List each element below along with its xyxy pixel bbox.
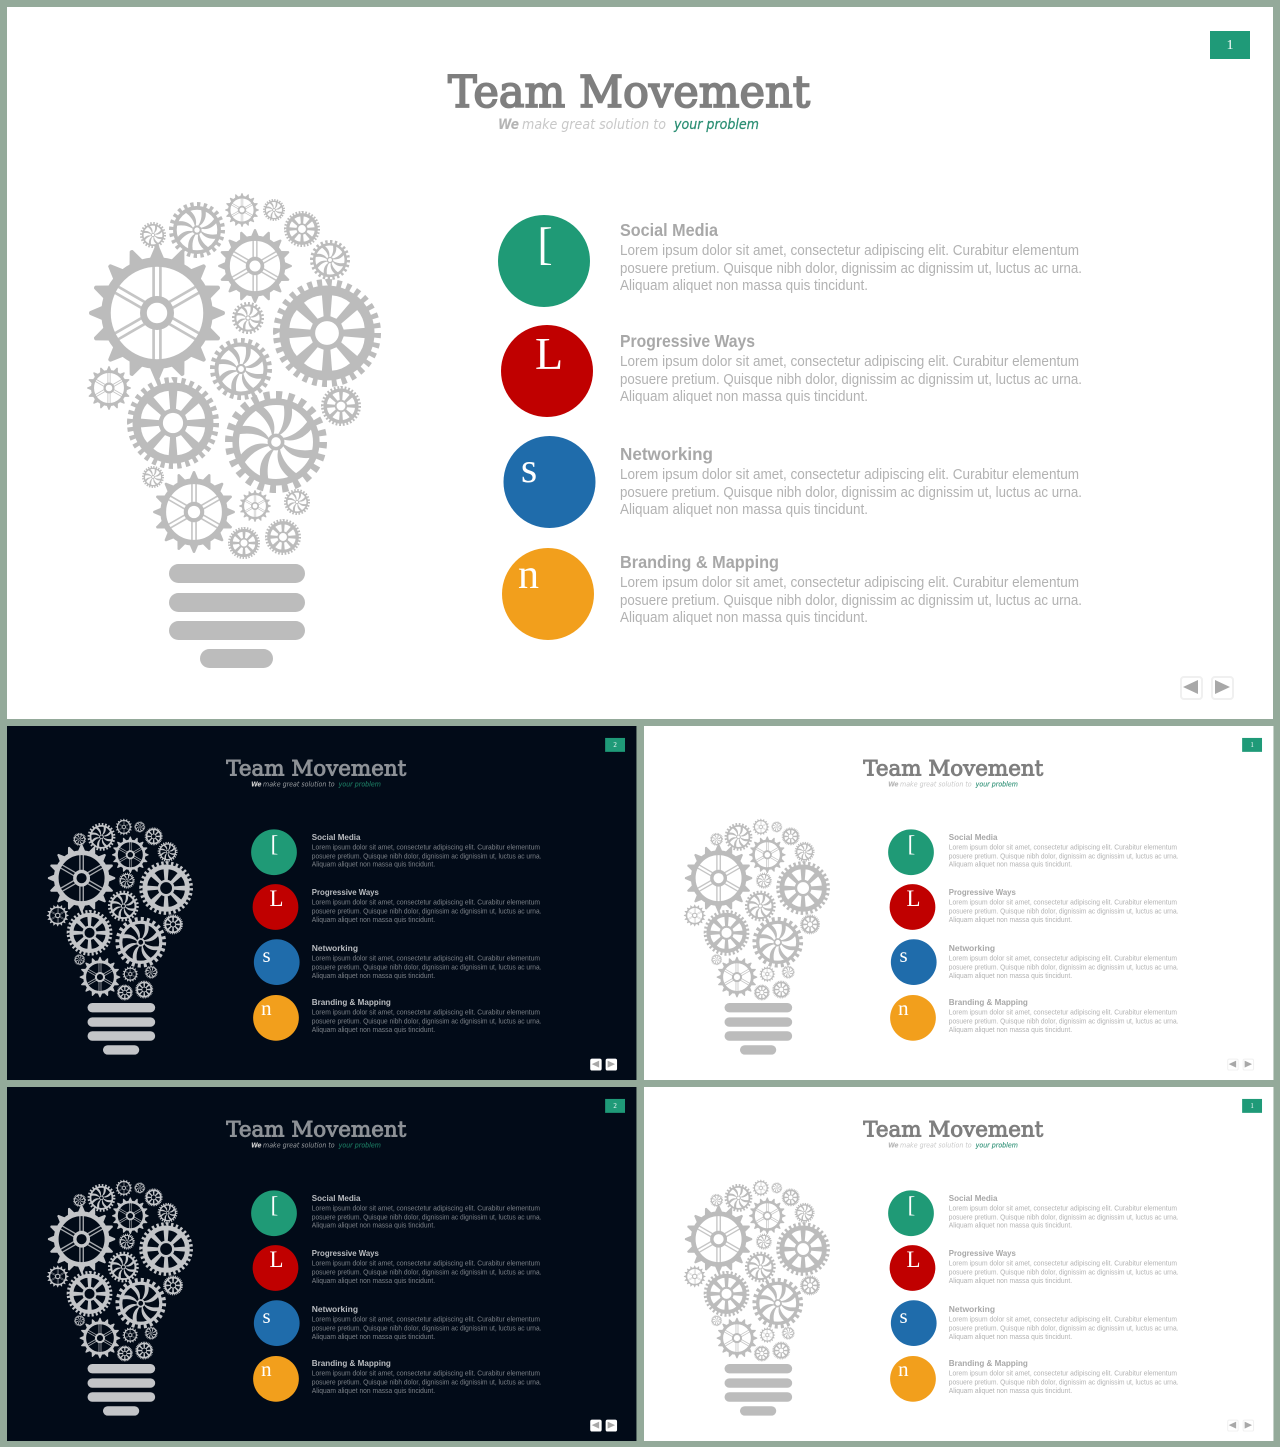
body text: posuere pretium. Quisque nibh dolor, dignissim ac dignissim ut, luctus ac urna. — [620, 593, 1082, 609]
icon: bulb base bars — [725, 1364, 792, 1416]
body text: Lorem ipsum dolor sit amet, consectetur adipiscing elit. Curabitur elementum — [620, 354, 1079, 370]
icon: red circle: L — [269, 886, 283, 911]
item: Social Media — [251, 1190, 541, 1236]
heading: Networking — [620, 444, 713, 464]
title: Team Movement — [226, 757, 406, 782]
body text: Aliquam aliquet non massa quis tincidunt. — [949, 1332, 1072, 1341]
heading: Progressive Ways — [312, 1248, 379, 1258]
body text: Aliquam aliquet non massa quis tincidunt. — [312, 1221, 435, 1230]
body text: Aliquam aliquet non massa quis tincidunt. — [312, 860, 435, 869]
body text: Lorem ipsum dolor sit amet, consectetur adipiscing elit. Curabitur elementum — [949, 1368, 1177, 1377]
body text: Lorem ipsum dolor sit amet, consectetur adipiscing elit. Curabitur elementum — [312, 1203, 540, 1212]
icon: gear cluster of light bulb — [47, 1179, 191, 1361]
body text — [949, 1007, 1178, 1034]
body text: Aliquam aliquet non massa quis tincidunt. — [949, 1221, 1072, 1230]
body text: posuere pretium. Quisque nibh dolor, dignissim ac dignissim ut, luctus ac urna. — [312, 851, 541, 860]
icon: blue circle — [254, 1300, 300, 1346]
icon: red circle: L — [906, 1247, 920, 1272]
body text: posuere pretium. Quisque nibh dolor, dignissim ac dignissim ut, luctus ac urna. — [949, 1377, 1178, 1386]
body text: Aliquam aliquet non massa quis tincidunt. — [620, 610, 868, 626]
page number badge: 1 — [1250, 1102, 1254, 1110]
subtitle: We — [498, 117, 519, 133]
body text — [949, 897, 1178, 924]
body text: posuere pretium. Quisque nibh dolor, dignissim ac dignissim ut, luctus ac urna. — [620, 485, 1082, 501]
icon: blue circle: s — [262, 943, 271, 967]
slide: small dark slide, bottom left — [7, 1087, 636, 1441]
heading: Networking — [949, 1304, 995, 1314]
body text — [312, 1258, 541, 1285]
page number badge: 2 — [613, 741, 617, 749]
body text — [312, 1368, 541, 1395]
icon: blue circle: s — [262, 1304, 271, 1328]
body text — [620, 243, 1082, 294]
subtitle: your problem — [338, 1142, 381, 1150]
title: Team Movement — [448, 67, 810, 118]
item: Progressive Ways — [253, 884, 541, 930]
icon: orange circle: n — [898, 1357, 909, 1381]
page number badge — [605, 1099, 625, 1113]
heading: Social Media — [620, 220, 718, 240]
heading: Branding & Mapping — [312, 1358, 391, 1368]
item: Social Media — [888, 1190, 1178, 1236]
icon: red circle: L — [906, 886, 920, 911]
body text — [949, 1258, 1178, 1285]
slide: small dark slide, top left — [7, 726, 636, 1080]
item: Networking — [891, 939, 1178, 985]
body text: Lorem ipsum dolor sit amet, consectetur adipiscing elit. Curabitur elementum — [949, 1203, 1177, 1212]
body text — [949, 1203, 1178, 1230]
body text — [620, 575, 1082, 626]
body text: Lorem ipsum dolor sit amet, consectetur adipiscing elit. Curabitur elementum — [312, 842, 540, 851]
body text — [620, 354, 1082, 405]
icon: green circle — [888, 1190, 934, 1236]
body text: Aliquam aliquet non massa quis tincidunt. — [620, 502, 868, 518]
heading: Branding & Mapping — [620, 552, 779, 572]
icon: red circle — [253, 884, 298, 930]
heading: Progressive Ways — [620, 331, 755, 351]
item: Networking — [254, 1300, 541, 1346]
subtitle: make great solution to — [263, 1142, 335, 1150]
icon: orange circle — [253, 1356, 299, 1402]
item: Networking — [254, 939, 541, 985]
body text: Lorem ipsum dolor sit amet, consectetur adipiscing elit. Curabitur elementum — [620, 243, 1079, 259]
body text — [312, 1007, 541, 1034]
heading: Progressive Ways — [949, 1248, 1016, 1258]
item: Branding & Mapping — [502, 548, 1082, 640]
heading: Social Media — [949, 1193, 998, 1203]
body text — [620, 467, 1082, 518]
body text: Aliquam aliquet non massa quis tincidunt. — [312, 1332, 435, 1341]
body text: Aliquam aliquet non massa quis tincidunt. — [949, 971, 1072, 980]
body text: Aliquam aliquet non massa quis tincidunt. — [620, 278, 868, 294]
body text: Aliquam aliquet non massa quis tincidunt. — [312, 1276, 435, 1285]
item: Social Media — [888, 829, 1178, 875]
body text: Aliquam aliquet non massa quis tincidunt. — [949, 860, 1072, 869]
heading: Branding & Mapping — [312, 997, 391, 1007]
body text: Lorem ipsum dolor sit amet, consectetur adipiscing elit. Curabitur elementum — [949, 842, 1177, 851]
icon: blue circle — [891, 939, 937, 985]
body text: posuere pretium. Quisque nibh dolor, dignissim ac dignissim ut, luctus ac urna. — [949, 1324, 1178, 1333]
body text: posuere pretium. Quisque nibh dolor, dignissim ac dignissim ut, luctus ac urna. — [312, 906, 541, 915]
body text: Lorem ipsum dolor sit amet, consectetur adipiscing elit. Curabitur elementum — [312, 897, 540, 906]
item: Networking — [891, 1300, 1178, 1346]
item: Progressive Ways — [253, 1245, 541, 1291]
body text: posuere pretium. Quisque nibh dolor, dignissim ac dignissim ut, luctus ac urna. — [312, 1267, 541, 1276]
body text: posuere pretium. Quisque nibh dolor, dignissim ac dignissim ut, luctus ac urna. — [312, 1324, 541, 1333]
icon: green circle: [ — [908, 1192, 915, 1217]
body text: Lorem ipsum dolor sit amet, consectetur adipiscing elit. Curabitur elementum — [312, 1007, 540, 1016]
heading: Networking — [312, 1304, 358, 1314]
body text — [949, 954, 1178, 980]
body text: posuere pretium. Quisque nibh dolor, dignissim ac dignissim ut, luctus ac urna. — [312, 963, 541, 972]
slide: small light slide, top right — [644, 726, 1273, 1080]
icon: red circle: L — [269, 1247, 283, 1272]
icon: blue circle: s — [899, 943, 908, 967]
title: Team Movement — [863, 1118, 1043, 1143]
item: Branding & Mapping — [890, 1356, 1178, 1402]
subtitle: We — [888, 781, 899, 789]
body text: Lorem ipsum dolor sit amet, consectetur adipiscing elit. Curabitur elementum — [949, 1007, 1177, 1016]
title: Team Movement — [226, 1118, 406, 1143]
icon: orange circle: n — [261, 1357, 272, 1381]
subtitle: your problem — [975, 781, 1018, 789]
heading: Social Media — [312, 832, 361, 842]
body text: Lorem ipsum dolor sit amet, consectetur adipiscing elit. Curabitur elementum — [312, 1258, 540, 1267]
heading: Networking — [312, 943, 358, 953]
page number badge — [1242, 738, 1262, 752]
page number badge — [1242, 1099, 1262, 1113]
body text: Lorem ipsum dolor sit amet, consectetur adipiscing elit. Curabitur elementum — [949, 1315, 1177, 1324]
body text — [312, 1203, 541, 1230]
body text: Lorem ipsum dolor sit amet, consectetur adipiscing elit. Curabitur elementum — [312, 1315, 540, 1324]
body text — [312, 954, 541, 980]
page number badge — [605, 738, 625, 752]
icon: green circle — [251, 1190, 297, 1236]
icon: red circle — [253, 1245, 298, 1291]
icon: orange circle — [890, 1356, 936, 1402]
item: Branding & Mapping — [890, 995, 1178, 1041]
item: Progressive Ways — [890, 884, 1178, 930]
icon: red circle — [501, 325, 593, 417]
page number badge: 1 — [1250, 741, 1254, 749]
item: Social Media — [251, 829, 541, 875]
icon: orange circle: n — [898, 996, 909, 1020]
icon: green circle: [ — [271, 831, 278, 856]
heading: Social Media — [949, 832, 998, 842]
body text — [949, 1315, 1178, 1341]
icon: blue circle: s — [521, 446, 537, 492]
body text: Aliquam aliquet non massa quis tincidunt. — [949, 1025, 1072, 1034]
body text: Aliquam aliquet non massa quis tincidunt. — [949, 1386, 1072, 1395]
icon: green circle: [ — [271, 1192, 278, 1217]
body text: posuere pretium. Quisque nibh dolor, dignissim ac dignissim ut, luctus ac urna. — [620, 261, 1082, 277]
item: Networking — [504, 436, 1082, 528]
body text: posuere pretium. Quisque nibh dolor, dignissim ac dignissim ut, luctus ac urna. — [949, 1016, 1178, 1025]
body text: Lorem ipsum dolor sit amet, consectetur adipiscing elit. Curabitur elementum — [312, 1368, 540, 1377]
icon: orange circle — [502, 548, 594, 640]
body text: Aliquam aliquet non massa quis tincidunt. — [949, 915, 1072, 924]
body text: Lorem ipsum dolor sit amet, consectetur adipiscing elit. Curabitur elementum — [949, 1258, 1177, 1267]
heading: Branding & Mapping — [949, 1358, 1028, 1368]
page number badge: 1 — [1226, 38, 1234, 53]
icon: green circle: [ — [908, 831, 915, 856]
icon: orange circle: n — [261, 996, 272, 1020]
icon: gear cluster of light bulb — [684, 1179, 828, 1361]
subtitle: your problem — [673, 117, 759, 133]
title: Team Movement — [863, 757, 1043, 782]
slide: large light slide — [7, 7, 1273, 719]
body text: Aliquam aliquet non massa quis tincidunt. — [312, 915, 435, 924]
subtitle: We — [251, 781, 262, 789]
body text: Aliquam aliquet non massa quis tincidunt. — [949, 1276, 1072, 1285]
icon: blue circle: s — [899, 1304, 908, 1328]
body text: posuere pretium. Quisque nibh dolor, dignissim ac dignissim ut, luctus ac urna. — [620, 372, 1082, 388]
item: Progressive Ways — [890, 1245, 1178, 1291]
page number badge: 2 — [613, 1102, 617, 1110]
body text: Lorem ipsum dolor sit amet, consectetur adipiscing elit. Curabitur elementum — [312, 954, 540, 963]
icon: red circle — [890, 1245, 935, 1291]
body text: Lorem ipsum dolor sit amet, consectetur adipiscing elit. Curabitur elementum — [949, 897, 1177, 906]
body text — [312, 897, 541, 924]
body text: posuere pretium. Quisque nibh dolor, dignissim ac dignissim ut, luctus ac urna. — [312, 1016, 541, 1025]
body text — [312, 1315, 541, 1341]
heading: Networking — [949, 943, 995, 953]
icon: bulb base bars — [88, 1364, 155, 1416]
subtitle: We — [251, 1142, 262, 1150]
icon: blue circle — [254, 939, 300, 985]
icon: bulb base bars — [725, 1003, 792, 1055]
body text: Lorem ipsum dolor sit amet, consectetur adipiscing elit. Curabitur elementum — [620, 575, 1079, 591]
heading: Social Media — [312, 1193, 361, 1203]
item: Branding & Mapping — [253, 995, 541, 1041]
subtitle: your problem — [338, 781, 381, 789]
icon: gear cluster of light bulb — [684, 818, 828, 1000]
body text: posuere pretium. Quisque nibh dolor, dignissim ac dignissim ut, luctus ac urna. — [949, 1267, 1178, 1276]
body text: posuere pretium. Quisque nibh dolor, dignissim ac dignissim ut, luctus ac urna. — [312, 1212, 541, 1221]
body text: Aliquam aliquet non massa quis tincidunt. — [312, 971, 435, 980]
icon: gear cluster of light bulb — [87, 193, 376, 558]
navigation arrows — [1228, 1059, 1254, 1070]
navigation arrows — [1228, 1420, 1254, 1431]
body text: Aliquam aliquet non massa quis tincidunt. — [312, 1386, 435, 1395]
subtitle: make great solution to — [900, 781, 972, 789]
body text: posuere pretium. Quisque nibh dolor, dignissim ac dignissim ut, luctus ac urna. — [949, 963, 1178, 972]
icon: red circle — [890, 884, 935, 930]
body text: Lorem ipsum dolor sit amet, consectetur adipiscing elit. Curabitur elementum — [949, 954, 1177, 963]
body text: posuere pretium. Quisque nibh dolor, dignissim ac dignissim ut, luctus ac urna. — [949, 906, 1178, 915]
slide: small light slide, bottom right — [644, 1087, 1273, 1441]
item: Social Media — [498, 215, 1082, 307]
subtitle: make great solution to — [263, 781, 335, 789]
heading: Branding & Mapping — [949, 997, 1028, 1007]
heading: Progressive Ways — [949, 887, 1016, 897]
icon: green circle — [498, 215, 590, 307]
body text: posuere pretium. Quisque nibh dolor, dignissim ac dignissim ut, luctus ac urna. — [949, 1212, 1178, 1221]
body text: posuere pretium. Quisque nibh dolor, dignissim ac dignissim ut, luctus ac urna. — [949, 851, 1178, 860]
icon: blue circle — [891, 1300, 937, 1346]
body text: Lorem ipsum dolor sit amet, consectetur adipiscing elit. Curabitur elementum — [620, 467, 1079, 483]
body text: posuere pretium. Quisque nibh dolor, dignissim ac dignissim ut, luctus ac urna. — [312, 1377, 541, 1386]
heading: Progressive Ways — [312, 887, 379, 897]
body text — [949, 842, 1178, 869]
icon: green circle: [ — [537, 218, 553, 269]
icon: orange circle — [890, 995, 936, 1041]
body text — [312, 842, 541, 869]
subtitle: make great solution to — [900, 1142, 972, 1150]
icon: green circle — [888, 829, 934, 875]
icon: gear cluster of light bulb — [47, 818, 191, 1000]
icon: bulb base bars — [169, 564, 305, 668]
page number badge — [1210, 31, 1250, 59]
icon: green circle — [251, 829, 297, 875]
item: Progressive Ways — [501, 325, 1082, 417]
subtitle: We — [888, 1142, 899, 1150]
subtitle: your problem — [975, 1142, 1018, 1150]
body text — [949, 1368, 1178, 1395]
icon: blue circle — [504, 436, 596, 528]
item: Branding & Mapping — [253, 1356, 541, 1402]
icon: bulb base bars — [88, 1003, 155, 1055]
body text: Aliquam aliquet non massa quis tincidunt. — [620, 389, 868, 405]
icon: orange circle: n — [518, 552, 539, 598]
icon: red circle: L — [535, 328, 563, 379]
navigation arrows — [1181, 677, 1233, 699]
navigation arrows — [591, 1420, 617, 1431]
navigation arrows — [591, 1059, 617, 1070]
body text: Aliquam aliquet non massa quis tincidunt. — [312, 1025, 435, 1034]
subtitle: make great solution to — [522, 117, 666, 133]
icon: orange circle — [253, 995, 299, 1041]
